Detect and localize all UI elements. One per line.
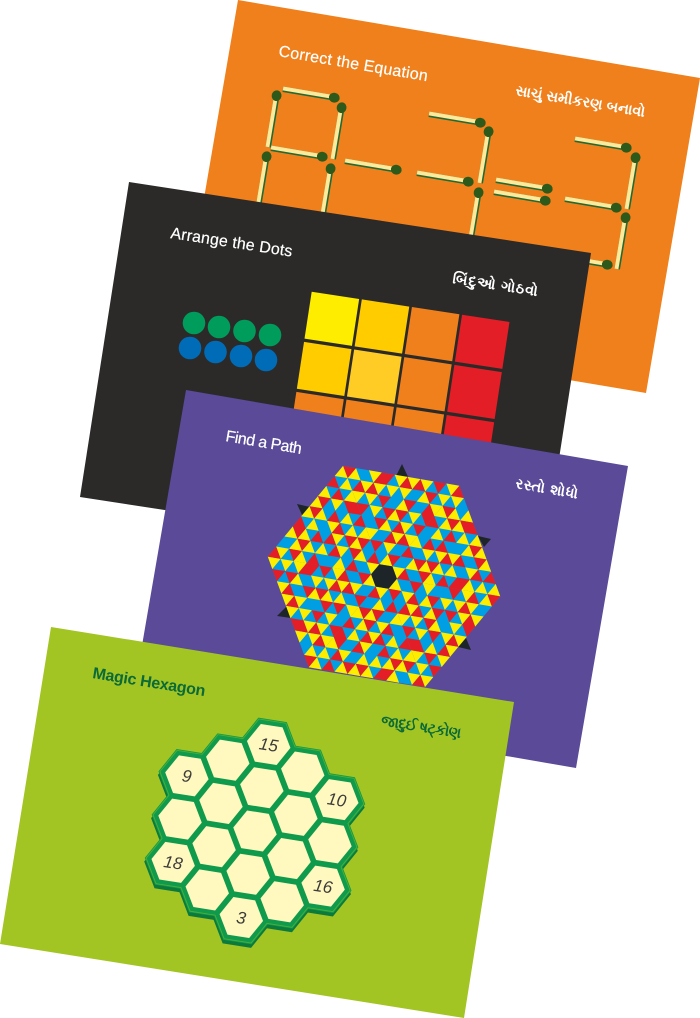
heading: correct the equation: Correct the Equation	[277, 43, 429, 85]
cell numbers: 3	[235, 908, 248, 928]
panel: magic hexagon	[0, 627, 514, 1018]
panel: arrange the dots	[80, 182, 591, 568]
heading: gujarati correct the equation: સાચું સમીકરણ બનાવો	[514, 80, 647, 121]
cell numbers	[155, 722, 355, 941]
heading: find a path: Find a Path	[224, 428, 303, 458]
cell numbers: 9	[181, 766, 193, 787]
cell numbers: 18	[162, 852, 184, 874]
panel: correct the equation	[184, 0, 700, 393]
cell numbers: 16	[312, 876, 334, 898]
triangle mosaic hexagon	[251, 456, 517, 697]
hexagon board	[137, 707, 372, 959]
blue dots	[179, 337, 277, 371]
heading: arrange the dots: Arrange the Dots	[169, 225, 294, 261]
panel: find a path	[134, 390, 628, 768]
heading: gujarati magic hexagon: જાદુઈ ષટ્કોણ	[380, 710, 463, 744]
matchstick equation	[253, 84, 641, 270]
heading: gujarati find a path: રસ્તો શોધો	[514, 473, 580, 503]
cell numbers: 15	[258, 734, 280, 756]
cell numbers: 10	[326, 789, 348, 811]
centre hexagon	[369, 563, 399, 590]
heading: magic hexagon: Magic Hexagon	[91, 665, 207, 700]
colour grid	[289, 292, 509, 469]
black edge markers	[277, 464, 491, 650]
green dots	[183, 312, 281, 346]
heading: gujarati arrange the dots: બિંદુઓ ગોઠવો	[451, 268, 540, 300]
